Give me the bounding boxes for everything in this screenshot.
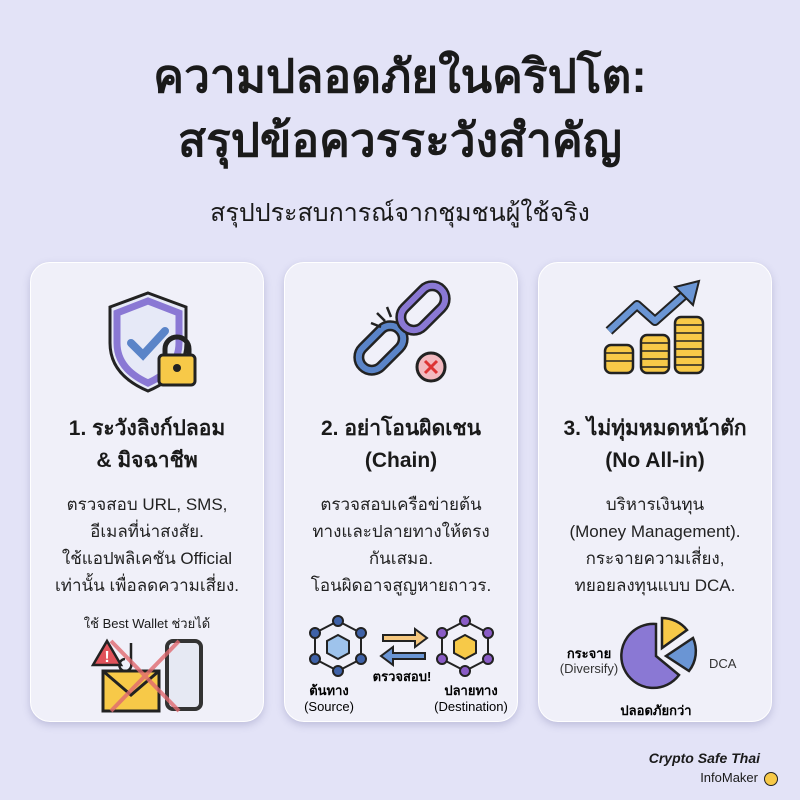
text block: ใช้แอปพลิเคชัน Official bbox=[62, 549, 232, 568]
logo: Crypto Safe Thai bbox=[649, 750, 760, 766]
heading: (No All-in) bbox=[605, 449, 705, 472]
diagram: source to destination: (Destination) bbox=[434, 699, 508, 714]
text block bbox=[55, 495, 239, 595]
text block: ทยอยลงทุนแบบ DCA. bbox=[575, 576, 735, 595]
text block: (Money Management). bbox=[569, 522, 741, 541]
diagram: source to destination: ตรวจสอบ! bbox=[373, 669, 431, 684]
text block bbox=[569, 495, 741, 596]
pie chart: DCA bbox=[709, 656, 737, 671]
text block: โอนผิดอาจสูญหายถาวร. bbox=[311, 576, 491, 595]
heading: & มิจฉาชีพ bbox=[96, 449, 198, 472]
heading: 3. ไม่ทุ่มหมดหน้าตัก bbox=[563, 417, 747, 440]
heading: (Chain) bbox=[365, 449, 437, 472]
callout: ใช้ Best Wallet ช่วยได้ bbox=[84, 616, 210, 631]
title bbox=[153, 50, 647, 169]
logo: InfoMaker bbox=[700, 770, 758, 785]
logo bbox=[649, 750, 778, 786]
text block: ตรวจสอบ URL, SMS, bbox=[67, 495, 227, 514]
pie chart: กระจาย bbox=[567, 646, 611, 661]
heading: 2. อย่าโอนผิดเชน bbox=[321, 417, 481, 440]
text block: เท่านั้น เพื่อลดความเสี่ยง. bbox=[55, 576, 239, 595]
icon: phishing bbox=[90, 638, 203, 712]
panel: fake links bbox=[30, 262, 264, 722]
pie chart: ปลอดภัยกว่า bbox=[620, 703, 692, 718]
title: สรุปข้อควรระวังสำคัญ bbox=[178, 114, 622, 166]
title: ความปลอดภัยในคริปโต: bbox=[153, 50, 647, 102]
text block: กันเสมอ. bbox=[369, 549, 433, 568]
icon: broken chain bbox=[353, 280, 451, 382]
diagram: source to destination: ต้นทาง bbox=[309, 683, 349, 698]
text block: กระจายความเสี่ยง, bbox=[586, 549, 724, 568]
icon: coins with arrow bbox=[604, 280, 704, 374]
diagram: source to destination: (Source) bbox=[304, 699, 354, 714]
text block bbox=[310, 495, 491, 596]
diagram: source to destination bbox=[304, 615, 508, 714]
text block: ตรวจสอบเครือข่ายต้น bbox=[320, 495, 482, 514]
pie chart bbox=[560, 616, 737, 718]
pie chart: (Diversify) bbox=[560, 661, 618, 676]
heading bbox=[321, 416, 481, 472]
heading bbox=[563, 416, 747, 472]
panel: wrong chain bbox=[284, 262, 518, 722]
icon: shield with lock bbox=[108, 291, 196, 393]
panel: no all-in bbox=[538, 262, 772, 722]
text block: ทางและปลายทางให้ตรง bbox=[312, 522, 490, 541]
text block: บริหารเงินทุน bbox=[606, 495, 704, 514]
heading bbox=[69, 416, 225, 472]
icon: phishing: ! bbox=[104, 649, 110, 666]
diagram: source to destination: ปลายทาง bbox=[444, 683, 498, 698]
subtitle: สรุปประสบการณ์จากชุมชนผู้ใช้จริง bbox=[210, 199, 590, 227]
text block: อีเมลที่น่าสงสัย. bbox=[90, 522, 204, 541]
heading: 1. ระวังลิงก์ปลอม bbox=[69, 417, 225, 440]
